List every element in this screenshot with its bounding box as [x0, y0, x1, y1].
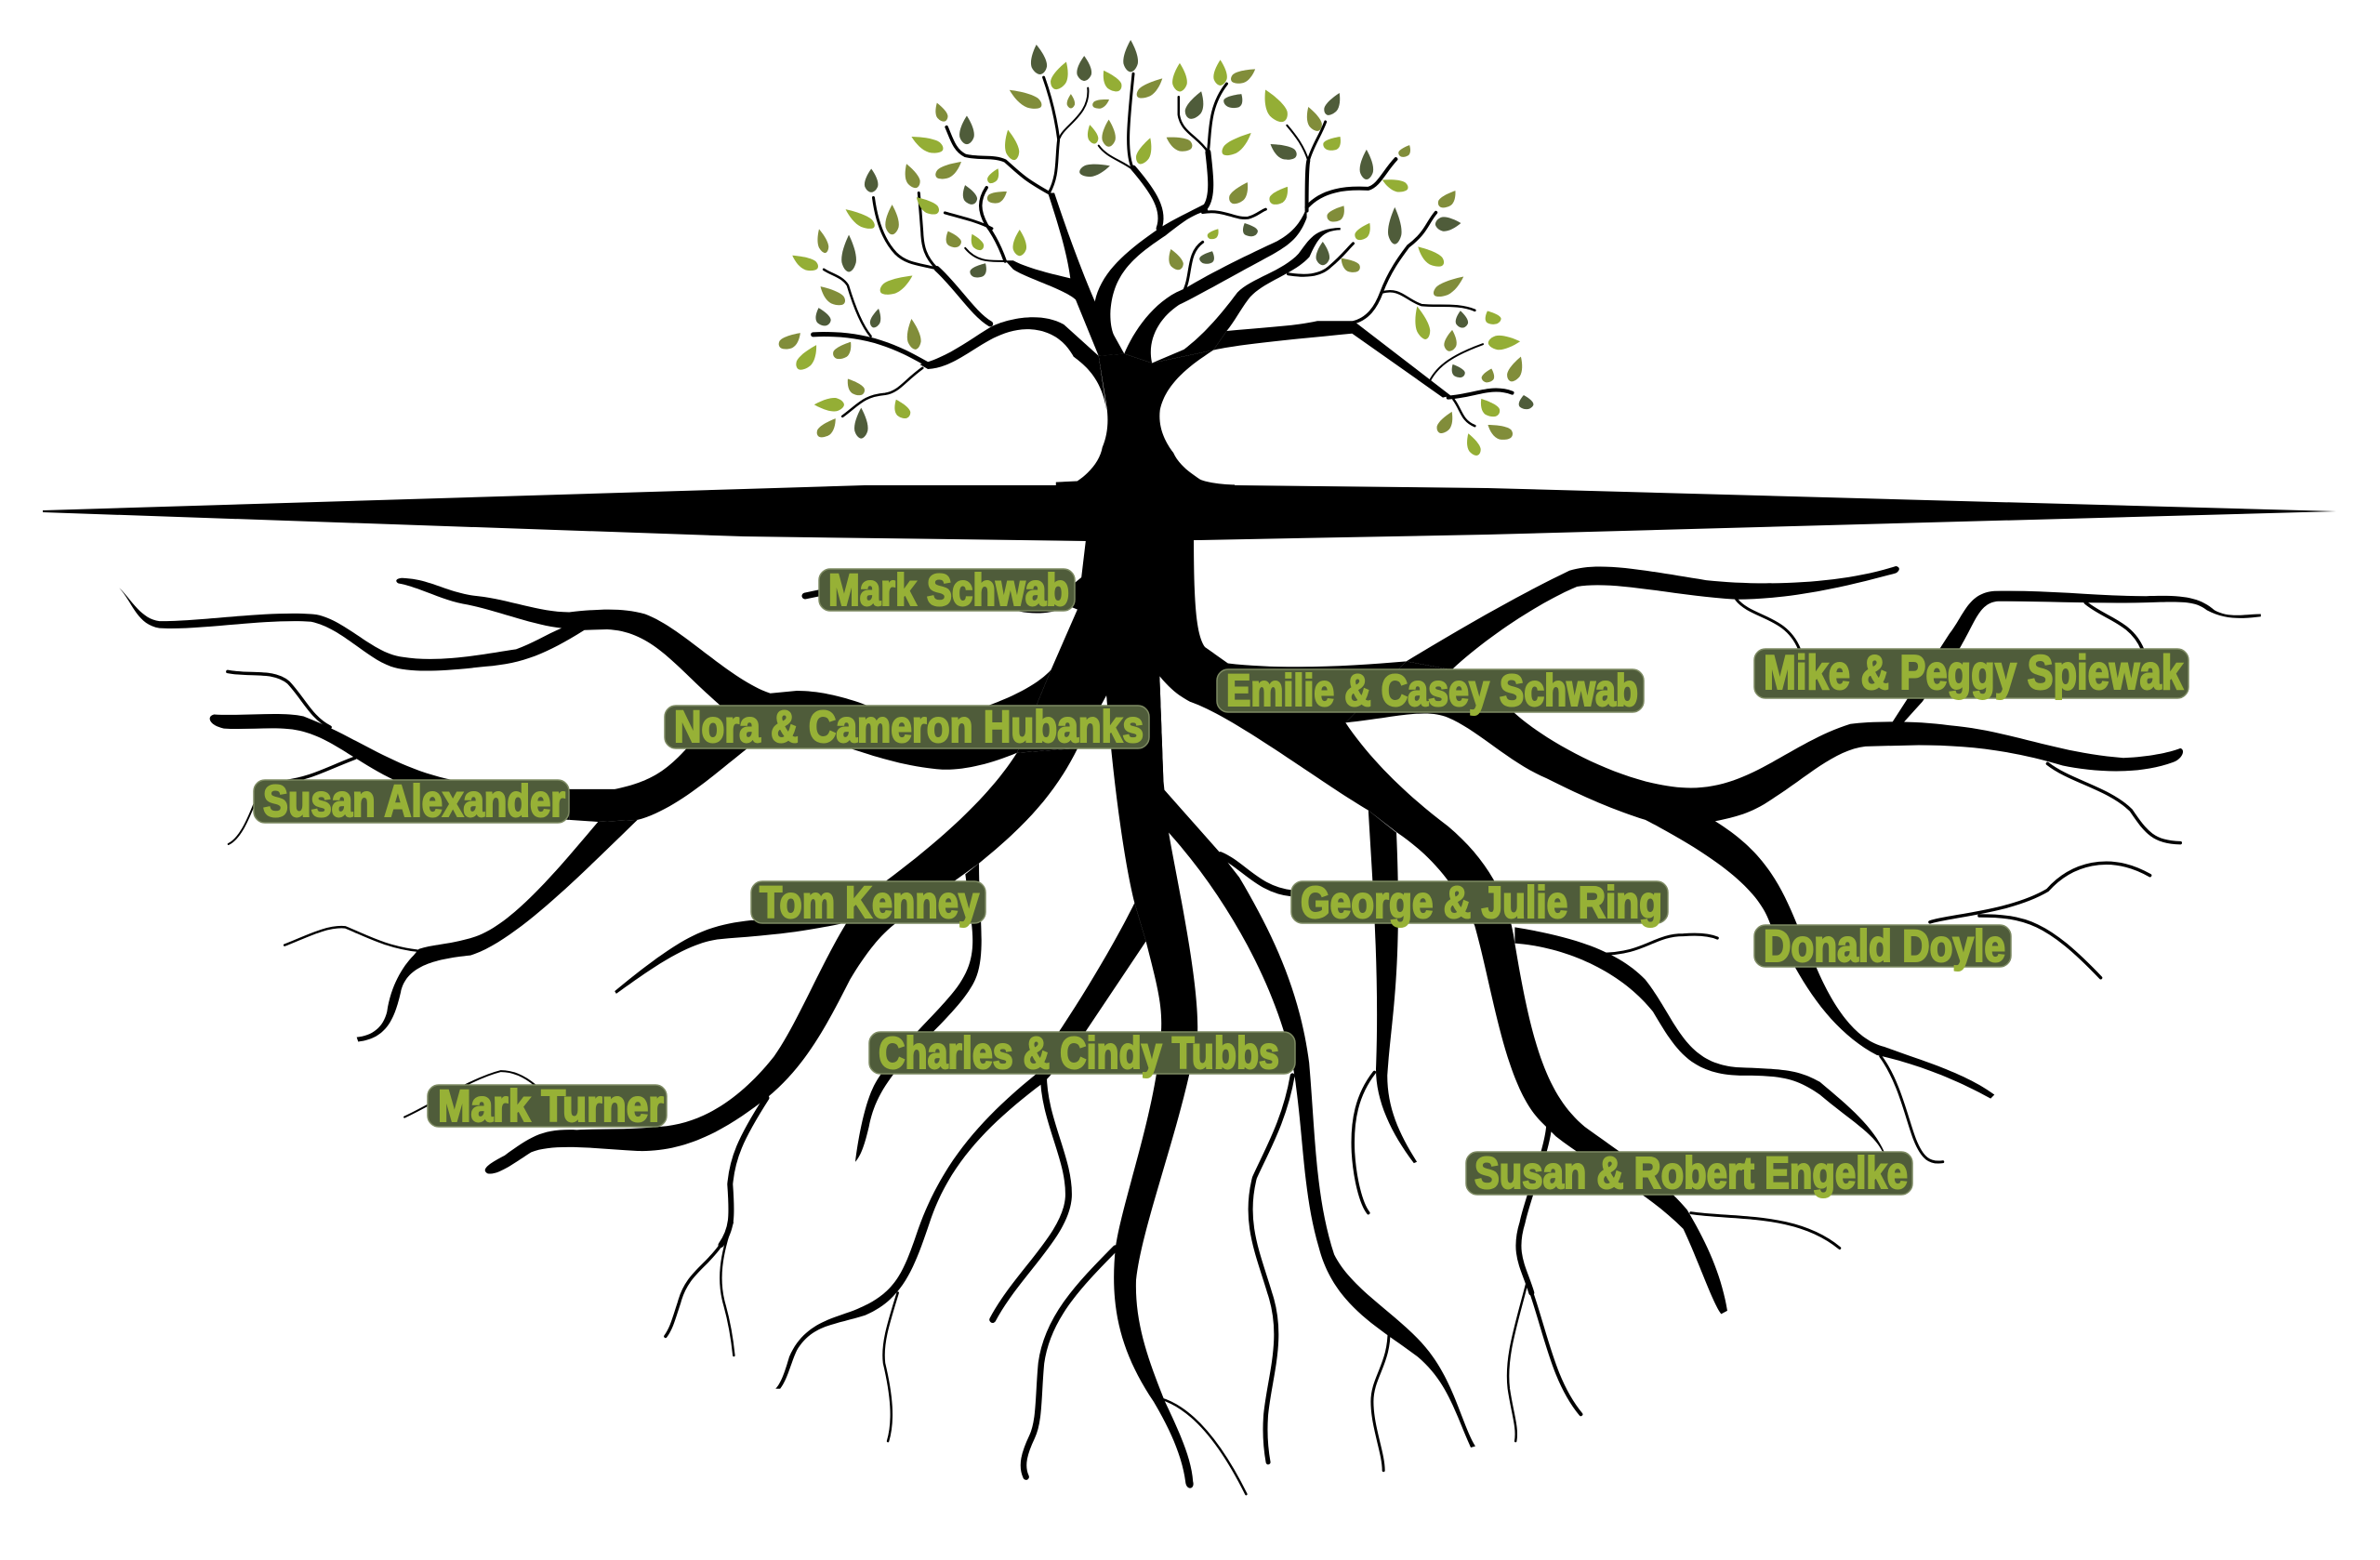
ground line	[43, 485, 2336, 541]
label: Mark Schwab: Mark Schwab	[828, 566, 1069, 615]
thin rootlets right	[1159, 600, 2180, 1494]
root: behind Tom Kenney down to Charles label	[855, 864, 982, 1162]
left limb	[919, 317, 1106, 410]
label: Susan & Robert Engelke: Susan & Robert Engelke	[1474, 1149, 1908, 1198]
root: Emilie and George main	[1190, 647, 1727, 1314]
label: Tom Kenney: Tom Kenney	[760, 879, 979, 928]
centre limbs	[1005, 193, 1124, 356]
root: central taproot	[1106, 676, 1197, 1488]
root: lower left fork	[357, 820, 638, 1041]
right limbs	[1152, 228, 1341, 363]
label: Nora & Cameron Hubanks: Nora & Cameron Hubanks	[674, 703, 1144, 752]
thin branches	[813, 73, 1513, 426]
root: Tom Kenney branch	[615, 920, 842, 994]
label: Susan Alexander: Susan Alexander	[263, 777, 565, 826]
central trunk below ground	[1017, 532, 1214, 785]
root stub behind Mark Schwab	[805, 574, 1088, 614]
root: George right branch	[1514, 927, 1884, 1152]
label: Mark Turner: Mark Turner	[438, 1082, 664, 1131]
root: George down branch	[1368, 811, 1417, 1163]
label: Donald Doyle: Donald Doyle	[1764, 922, 2005, 972]
root: upper left (Nora)	[119, 578, 1051, 822]
label: George & Julie Ring: George & Julie Ring	[1301, 879, 1662, 928]
roots: left half	[119, 532, 1214, 1488]
root: Susan Alexander branch	[210, 714, 569, 820]
roots: right half	[1156, 566, 2261, 1494]
leaves	[774, 40, 1535, 456]
trunk	[1056, 350, 1235, 496]
root: main right band and Donald Doyle	[1345, 661, 2183, 1099]
root: Mike and Peggy branch	[1892, 591, 2261, 722]
label: Charles & Cindy Tubbs: Charles & Cindy Tubbs	[879, 1029, 1279, 1078]
tree: trunk and branches	[774, 40, 1535, 496]
root: central right	[1156, 780, 1475, 1448]
label: Emilie & Casey Schwab: Emilie & Casey Schwab	[1226, 667, 1638, 716]
thin rootlets left	[228, 671, 1116, 1477]
root: Charles and Cindy	[775, 903, 1146, 1389]
label: Mike & Peggy Spiewak: Mike & Peggy Spiewak	[1764, 646, 2183, 700]
root: Tom Kenney to Mark Turner	[485, 748, 1078, 1174]
root: upper right branch	[1407, 566, 1899, 669]
